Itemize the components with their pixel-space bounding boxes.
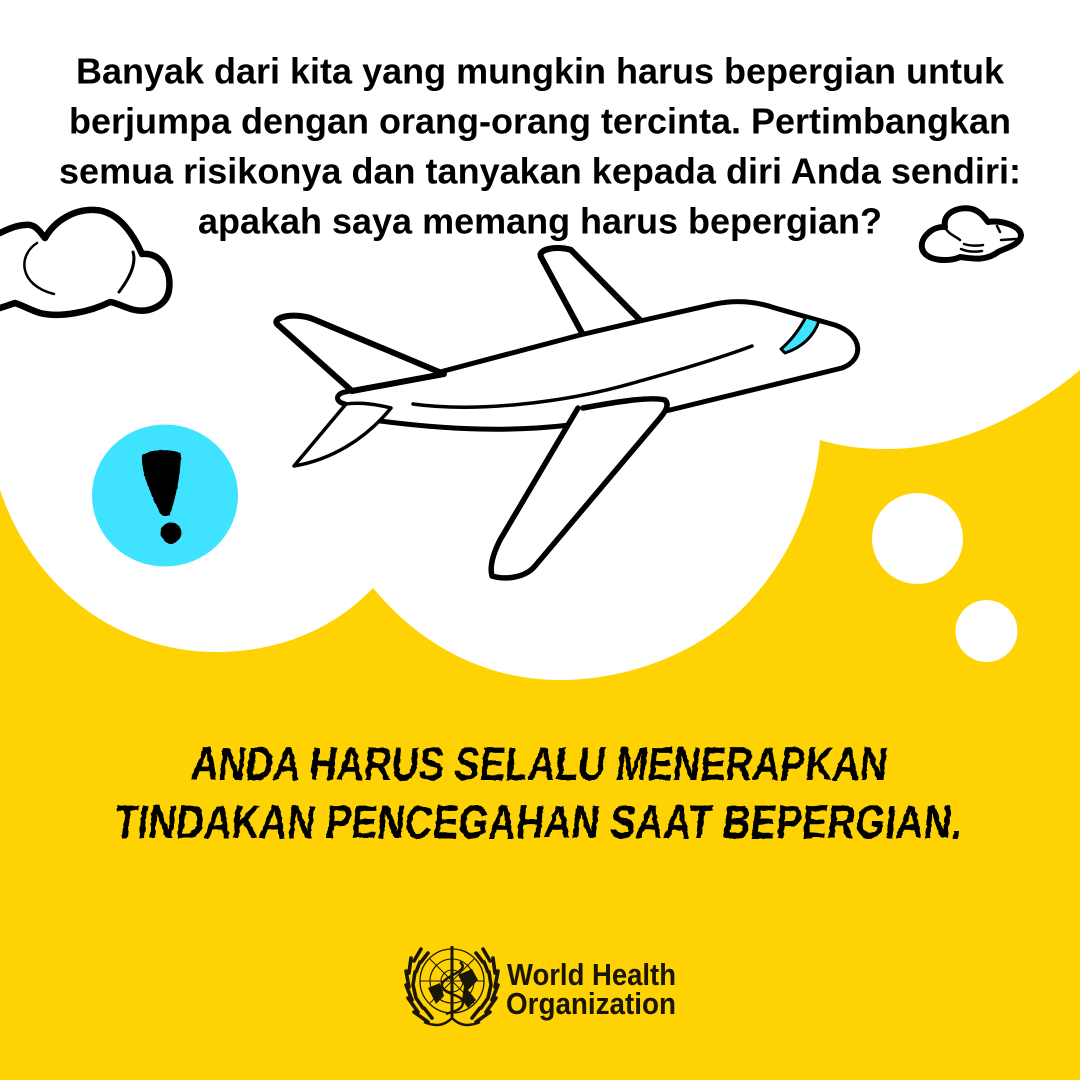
tagline text [112,737,965,848]
white thought cloud background [0,0,1080,680]
logo emblem [406,946,498,1025]
heading text [59,50,1021,242]
icon: left cloud [0,210,169,315]
heading text: semua risikonya dan tanyakan kepada diri Anda sendiri: [59,150,1021,192]
thought bubble: large circle [872,493,963,584]
tail stabilizer [294,403,391,466]
upper wing [541,248,640,333]
lower wing [491,399,667,578]
icon: right cloud [922,208,1021,260]
heading text: berjumpa dengan orang-orang tercinta. Pertimbangkan [69,100,1011,142]
cockpit window [781,317,819,353]
heading text: apakah saya memang harus bepergian? [198,200,882,242]
logo: World Health Organization: World Health [507,957,676,992]
fuselage [338,302,858,429]
logo: World Health Organization: Organization [506,986,676,1021]
icon: exclamation badge [92,424,238,566]
tagline text: ANDA HARUS SELALU MENERAPKAN [189,737,890,790]
thought bubble: small circle [956,600,1018,662]
cheat line [413,346,752,407]
heading text: Banyak dari kita yang mungkin harus bepergian untuk [76,50,1005,92]
icon: airplane [276,248,858,578]
tail fin [276,316,444,391]
logo: World Health Organization [406,946,676,1025]
